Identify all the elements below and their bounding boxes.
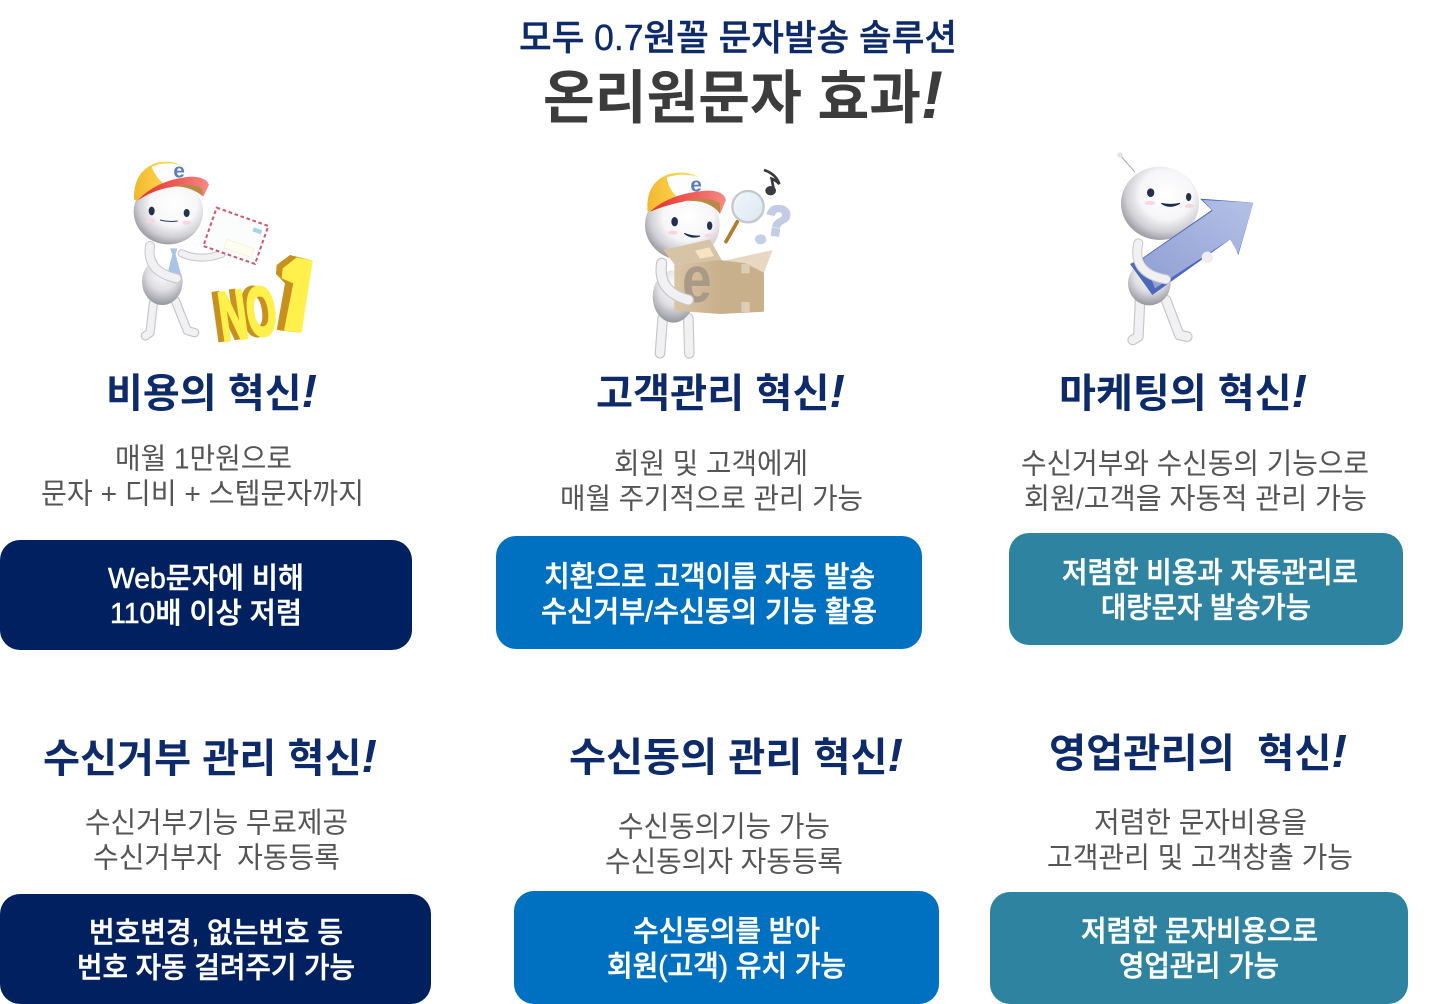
illustration: mascot with envelope and NO1: [134, 159, 313, 356]
text: customer management description: [560, 448, 863, 516]
callout: opt-in: [514, 891, 939, 1004]
text: sales description: 고객관리 및 고객창출 가능: [1047, 842, 1353, 874]
logo: e on cap: e: [690, 173, 702, 196]
text: customer management description: 회원 및 고객에게: [614, 448, 808, 480]
title: [519, 17, 957, 133]
graphic: NO1: [208, 255, 313, 356]
title line: main heading: 온리원문자 효과!: [543, 57, 943, 133]
callout: customer management: 치환으로 고객이름 자동 발송: [544, 560, 875, 594]
callout: sales: 저렴한 문자비용으로: [1081, 915, 1318, 948]
callout: cost: 110배 이상 저렴: [110, 597, 302, 630]
callout: sales: [990, 892, 1408, 1004]
heading: opt-out management innovation: 수신거부 관리 혁신!: [43, 730, 377, 782]
heading: customer management innovation: 고객관리 혁신!: [596, 365, 845, 417]
illustration: mascot holding rising arrow: [1117, 152, 1253, 340]
text: customer management description: 매월 주기적으로 관리 가능: [560, 482, 863, 516]
graphic: NO1: NO: [208, 270, 275, 356]
title line: subtitle: 모두 0.7원꼴 문자발송 솔루션: [519, 17, 957, 58]
callout: marketing: 대량문자 발송가능: [1101, 592, 1311, 624]
text: sales description: 저렴한 문자비용을: [1094, 808, 1307, 840]
text: opt-out description: 수신거부자 자동등록: [93, 842, 340, 874]
callout: opt-in: 회원(고객) 유치 가능: [607, 950, 846, 983]
callout: cost: [0, 540, 412, 650]
text: opt-in description: 수신동의자 자동등록: [605, 846, 843, 878]
text: marketing description: 회원/고객을 자동적 관리 가능: [1024, 482, 1367, 516]
callout: sales: 영업관리 가능: [1119, 950, 1279, 983]
heading: sales management innovation: 영업관리의 혁신!: [1049, 725, 1347, 777]
text: opt-in description: 수신동의기능 가능: [618, 812, 830, 844]
callout: opt-in: 수신동의를 받아: [633, 916, 820, 948]
callout: customer management: 수신거부/수신동의 기능 활용: [541, 596, 877, 628]
graphic: NO1: NO: [214, 270, 281, 356]
icon: question mark: ?: [762, 196, 794, 246]
icon: music note: [764, 170, 779, 195]
callout: opt-out: 번호변경, 없는번호 등: [89, 916, 343, 950]
callout: customer management: [496, 536, 922, 649]
text: cost description: 매월 1만원으로: [115, 442, 292, 476]
callout: cost: Web문자에 비해: [108, 562, 304, 595]
callout: marketing: [1009, 533, 1403, 645]
heading: opt-in management innovation: 수신동의 관리 혁신!: [569, 729, 903, 781]
text: cost description: [41, 442, 364, 510]
text: opt-out description: [85, 808, 348, 874]
heading: marketing innovation: 마케팅의 혁신!: [1059, 365, 1307, 417]
text: opt-out description: 수신거부기능 무료제공: [85, 808, 348, 840]
text: marketing description: [1021, 448, 1369, 516]
illustration: mascot with box, magnifier and question mark: [645, 170, 794, 353]
callout: opt-out: 번호 자동 걸려주기 가능: [77, 952, 355, 984]
callout: opt-out: [0, 894, 431, 1004]
logo: e on box: e: [682, 243, 712, 316]
icon: magnifier: [726, 191, 764, 242]
text: marketing description: 수신거부와 수신동의 기능으로: [1021, 448, 1369, 480]
text: sales description: [1047, 808, 1353, 874]
logo: e on cap: e: [173, 159, 185, 182]
heading: cost innovation: 비용의 혁신!: [106, 365, 317, 417]
text: cost description: 문자 + 디비 + 스텝문자까지: [41, 478, 364, 510]
text: opt-in description: [605, 812, 843, 878]
callout: marketing: 저렴한 비용과 자동관리로: [1062, 556, 1358, 590]
